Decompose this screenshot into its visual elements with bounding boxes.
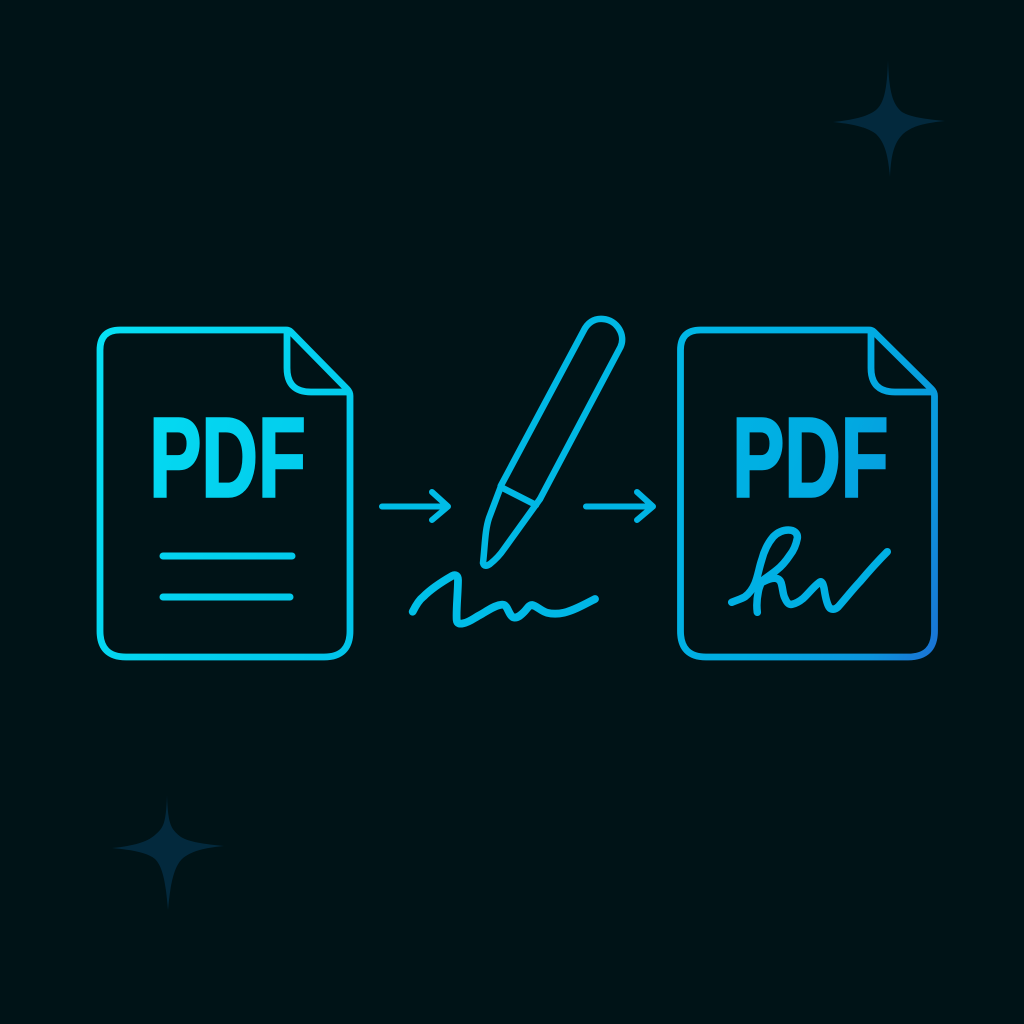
arrow: pen to signed document — [586, 492, 653, 520]
heading: PDF: PDF — [732, 394, 888, 520]
pen nib — [483, 487, 540, 566]
pen ferrule — [501, 487, 536, 505]
document outline — [680, 330, 934, 657]
document outline — [100, 330, 350, 657]
text line 2 — [163, 594, 290, 600]
page fold — [287, 332, 350, 392]
heading: PDF: PDF — [149, 394, 306, 520]
icon: pen — [483, 319, 622, 566]
arrow: document to pen — [382, 492, 448, 520]
signature stroke under pen — [413, 575, 595, 624]
text line 1 — [163, 552, 292, 560]
panel: source PDF document — [100, 330, 350, 657]
pen body — [501, 319, 622, 499]
panel: signed PDF document — [680, 330, 934, 657]
icon: sparkle bottom left — [112, 795, 224, 910]
page fold — [871, 332, 934, 392]
icon: sparkle top right — [833, 60, 945, 177]
handwritten signature — [732, 530, 887, 612]
